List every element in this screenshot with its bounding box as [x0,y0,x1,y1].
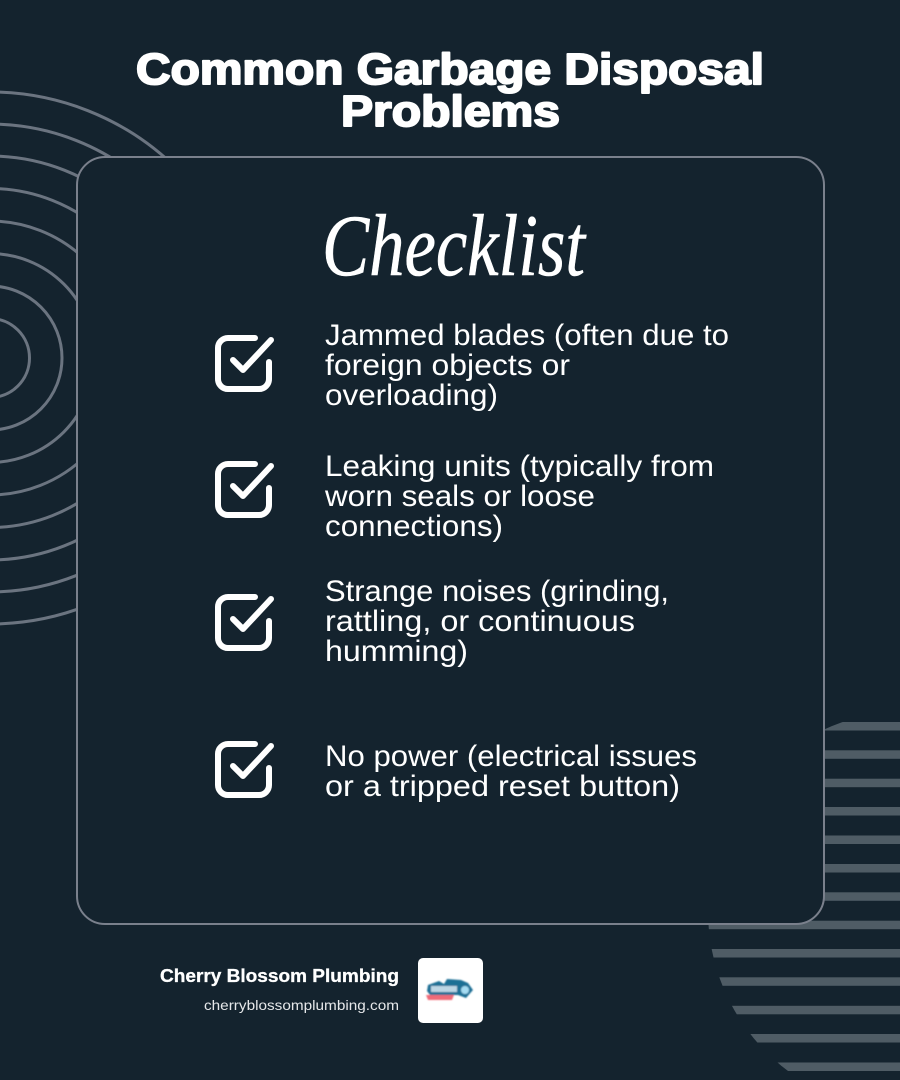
icon: checkbox 1 [218,338,271,389]
footer brand name: Cherry Blossom Plumbing [160,965,399,986]
text: leaking units [324,450,714,543]
item 1: jammed blades [218,319,729,412]
icon: checkbox 3 [218,597,271,648]
item 3: strange noises [218,575,669,668]
title [136,45,764,136]
text: leaking units: connections) [325,510,503,543]
text: jammed blades: overloading) [325,379,498,412]
text: leaking units: Leaking units (typically from [325,450,714,483]
checklist heading: Checklist [322,198,587,295]
text: strange noises: humming) [325,635,468,668]
item 2: leaking units [218,450,714,543]
text: no power [325,740,697,803]
striped circle decoration [700,722,900,1071]
title: Problems [341,87,560,136]
logo [418,958,483,1023]
text: strange noises [325,575,669,668]
panel: checklist card [77,157,824,924]
text: no power: or a tripped reset button) [325,770,680,803]
title: Common Garbage Disposal [136,45,764,94]
text: jammed blades [325,319,729,412]
concentric circles decoration [0,92,256,624]
text: no power: No power (electrical issues [325,740,697,773]
item 4: no power [218,740,697,803]
text: strange noises: rattling, or continuous [325,605,635,638]
icon: checkbox 4 [218,744,271,795]
text: leaking units: worn seals or loose [324,480,595,513]
icon: checkbox 2 [218,464,271,515]
footer website: cherryblossomplumbing.com [204,997,399,1013]
text: jammed blades: foreign objects or [325,349,570,382]
text: strange noises: Strange noises (grinding, [325,575,669,608]
text: jammed blades: Jammed blades (often due to [325,319,729,352]
